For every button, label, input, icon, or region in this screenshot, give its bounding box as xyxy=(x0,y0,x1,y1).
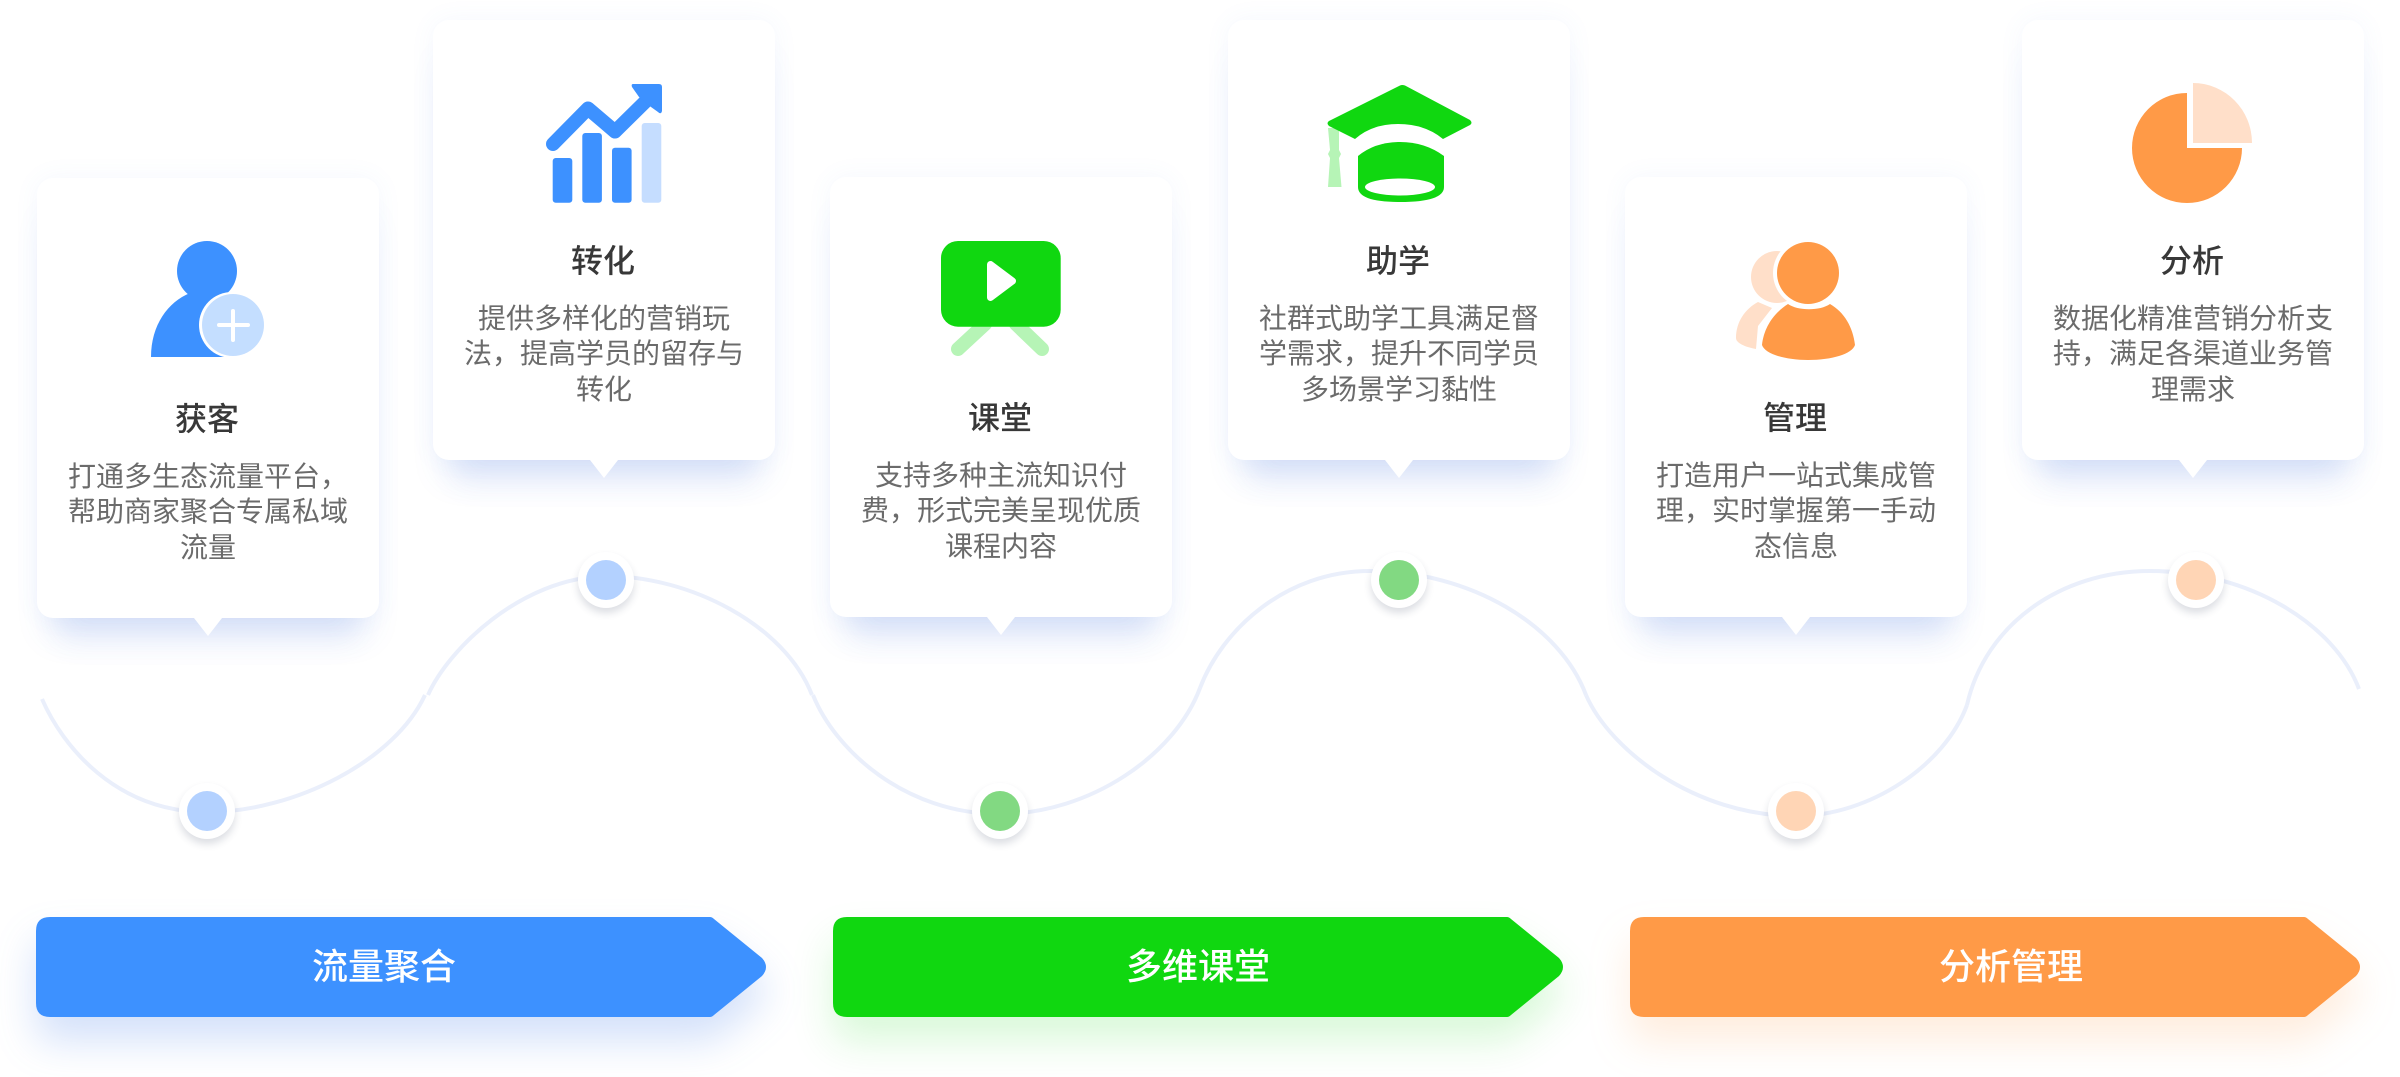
icon: person with plus xyxy=(151,241,264,357)
arrow banner: 分析管理: 分析管理 xyxy=(1939,946,2083,987)
icon: video screen xyxy=(941,241,1061,356)
panel: 转化 xyxy=(433,20,775,460)
node: 转化 marker xyxy=(578,552,634,608)
panel: 助学 xyxy=(1228,20,1570,460)
text: 分析 description: 数据化精准营销分析支 xyxy=(2053,302,2333,334)
text: 助学 description: 学需求，提升不同学员 xyxy=(1259,338,1539,369)
heading: 分析: 分析 xyxy=(2160,243,2224,279)
text: 课堂 description: 课程内容 xyxy=(945,530,1057,562)
arrow banner: 流量聚合 xyxy=(18,917,774,1058)
panel: 获客 xyxy=(37,178,379,618)
text: 管理 description xyxy=(1656,460,1936,562)
heading: 获客: 获客 xyxy=(175,401,239,437)
node: 分析 marker xyxy=(2168,552,2224,608)
text: 获客 description: 打通多生态流量平台， xyxy=(68,460,348,492)
panel: 管理 xyxy=(1625,177,1967,617)
text: 分析 description: 理需求 xyxy=(2151,374,2235,404)
text: 课堂 description: 费，形式完美呈现优质 xyxy=(861,495,1141,526)
text: 管理 description: 打造用户一站式集成管 xyxy=(1656,460,1936,490)
text: 助学 description xyxy=(1259,302,1539,404)
text: 课堂 description: 支持多种主流知识付 xyxy=(875,460,1127,490)
node: 管理 marker xyxy=(1768,783,1824,839)
icon: graduation cap xyxy=(1328,85,1472,202)
icon: pie chart xyxy=(2132,83,2252,203)
icon: rising bar chart xyxy=(546,84,662,203)
text: 转化 description: 转化 xyxy=(576,374,632,404)
heading: 助学: 助学 xyxy=(1366,243,1430,279)
text: 转化 description xyxy=(464,302,744,404)
panel: 分析 xyxy=(2022,20,2364,460)
text: 管理 description: 理，实时掌握第一手动 xyxy=(1656,495,1936,526)
text: 助学 description: 多场景学习黏性 xyxy=(1301,374,1497,404)
text: 获客 description xyxy=(68,460,348,562)
arrow banner: 多维课堂 xyxy=(819,917,1568,1055)
icon: two people xyxy=(1736,242,1855,360)
text: 转化 description: 法，提高学员的留存与 xyxy=(464,338,744,369)
panel: 课堂 xyxy=(830,177,1172,617)
text: 分析 description: 持，满足各渠道业务管 xyxy=(2053,338,2333,369)
text: 分析 description xyxy=(2053,302,2333,404)
heading: 管理: 管理 xyxy=(1763,400,1827,436)
arrow banner: 分析管理 xyxy=(1616,917,2363,1054)
arrow banner: 多维课堂: 多维课堂 xyxy=(1126,946,1270,987)
text: 管理 description: 态信息 xyxy=(1754,530,1838,562)
node: 获客 marker xyxy=(179,783,235,839)
text: 助学 description: 社群式助学工具满足督 xyxy=(1259,302,1539,334)
text: 转化 description: 提供多样化的营销玩 xyxy=(478,302,730,334)
text: 课堂 description xyxy=(861,460,1141,562)
arrow banner: 流量聚合: 流量聚合 xyxy=(312,946,456,987)
text: 获客 description: 帮助商家聚合专属私域 xyxy=(68,496,348,527)
text: 获客 description: 流量 xyxy=(180,532,236,562)
heading: 课堂: 课堂 xyxy=(968,400,1032,436)
node: 助学 marker xyxy=(1371,552,1427,608)
heading: 转化: 转化 xyxy=(571,243,635,279)
node: 课堂 marker xyxy=(972,783,1028,839)
